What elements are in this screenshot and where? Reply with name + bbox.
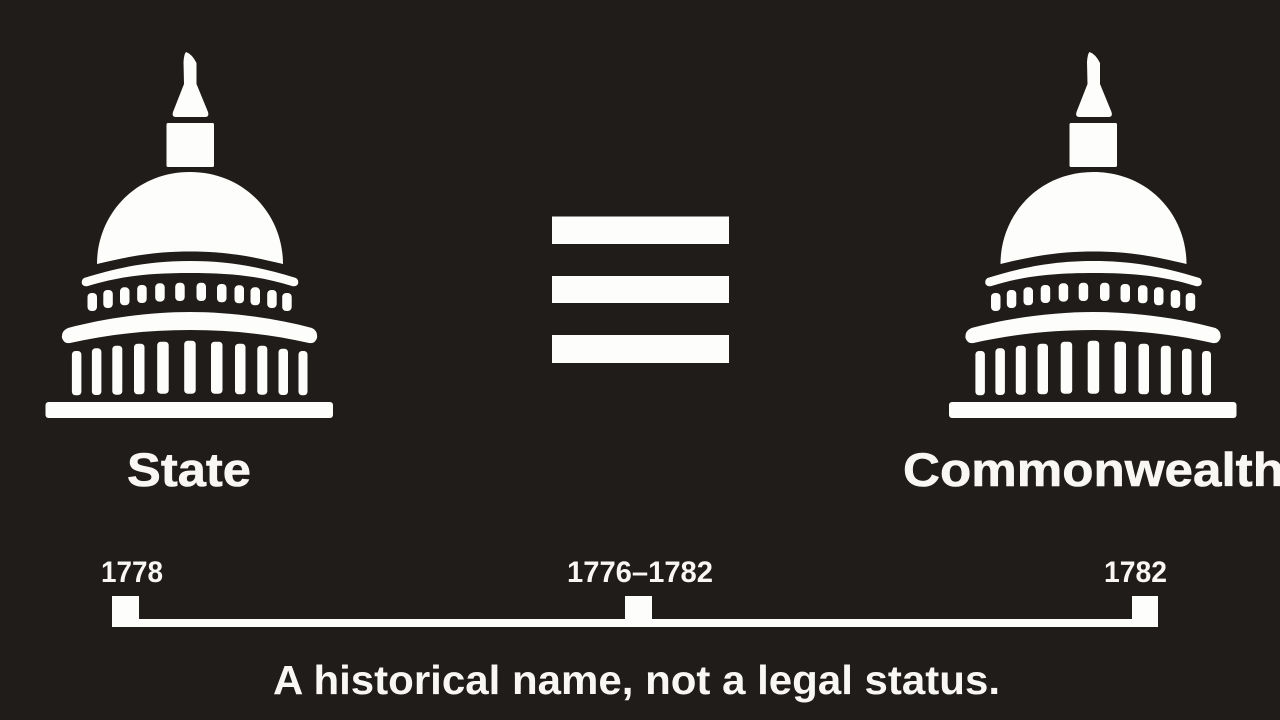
- date label: 1778: 1778: [101, 556, 163, 589]
- icon: commonwealth capitol building: [949, 52, 1236, 418]
- caption: A historical name, not a legal status.: [273, 657, 1000, 703]
- date label: 1782: 1782: [1104, 556, 1167, 589]
- icon: equals sign with three bars: [552, 216, 729, 363]
- timeline: [101, 556, 1167, 627]
- icon: state capitol building: [46, 52, 333, 418]
- date label: 1776–1782: 1776–1782: [567, 556, 713, 589]
- label: Commonwealth: Commonwealth: [903, 443, 1280, 496]
- label: State: State: [127, 443, 251, 496]
- timeline bar with three markers: [112, 596, 1158, 627]
